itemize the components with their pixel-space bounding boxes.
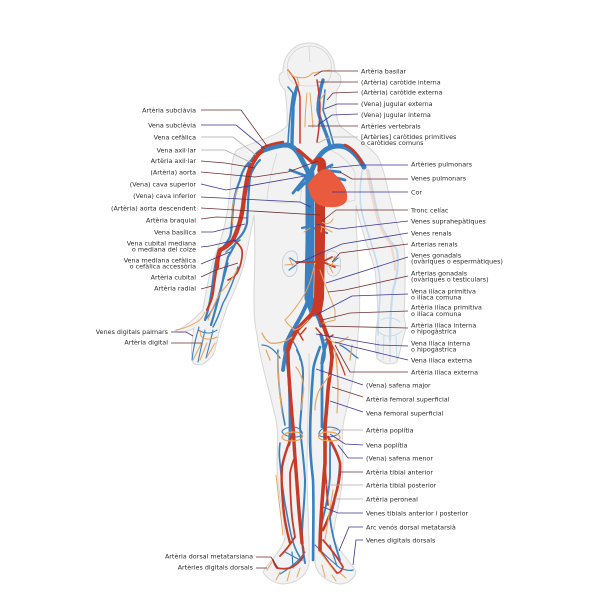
labels: right column lower: Artèria femoral superficial bbox=[366, 396, 450, 404]
labels: left column: Vena cefàlica bbox=[154, 134, 196, 142]
labels: right column middle: Venes renals bbox=[411, 230, 452, 238]
heart bbox=[308, 169, 347, 207]
labels: left column: Vena basílica bbox=[154, 228, 196, 236]
labels: right column upper bbox=[361, 68, 457, 147]
labels: right column lower: Venes tibials anterior i posterior bbox=[366, 510, 469, 518]
labels: left column: (Artèria) aorta descendent bbox=[111, 204, 196, 212]
labels: right column middle: (ovàriques o espermàtiques) bbox=[411, 258, 503, 266]
labels: right column lower: Vena poplítia bbox=[366, 442, 408, 450]
labels: right column middle: o ilíaca comuna bbox=[411, 310, 461, 318]
labels: right column middle: Venes suprahepàtiques bbox=[411, 218, 486, 226]
labels: left column: o mediana del colze bbox=[132, 246, 196, 254]
labels: left column: (Vena) cava inferior bbox=[133, 192, 196, 200]
faded right arm vessels bbox=[360, 167, 402, 362]
labels: right column middle: Artèria ilíaca primitiva bbox=[411, 304, 482, 312]
labels: right column upper: Artèria basilar bbox=[361, 68, 407, 76]
labels: right column middle: Artèria ilíaca interna bbox=[411, 322, 476, 330]
labels: right column upper: (Artèria) caròtide externa bbox=[361, 88, 443, 96]
labels: right column middle: o ilíaca comuna bbox=[411, 294, 461, 302]
labels: right column middle: Artèries pulmonars bbox=[411, 160, 473, 168]
labels: right column upper: [Artèries] caròtides primitives bbox=[361, 133, 457, 141]
labels: left column bbox=[96, 106, 254, 572]
labels: left column: Artèria digital bbox=[124, 338, 168, 346]
labels: left column: Artèria radial bbox=[154, 284, 196, 292]
labels: left column: Vena axil·lar bbox=[157, 146, 196, 154]
labels: right column middle: (ovàriques o testiculars) bbox=[411, 276, 489, 284]
labels: right column upper: Artèries vertebrals bbox=[361, 122, 421, 130]
labels: left column: Venes digitals palmars bbox=[96, 328, 169, 336]
labels: left column: Artèries digitals dorsals bbox=[178, 564, 254, 572]
labels: right column upper: (Vena) jugular interna bbox=[361, 111, 431, 119]
labels: right column middle: Tronc celíac bbox=[410, 206, 449, 214]
labels: right column middle: o hipogàstrica bbox=[411, 346, 456, 354]
labels: right column lower: Artèria peroneal bbox=[366, 496, 418, 504]
labels: right column lower: (Vena) safena major bbox=[366, 382, 431, 390]
labels: left column: o cefàlica accessòria bbox=[130, 262, 196, 270]
labels: right column middle: Venes pulmonars bbox=[411, 174, 467, 182]
labels: right column lower: Artèria tibial posterior bbox=[366, 482, 437, 490]
labels: left column: Artèria axil·lar bbox=[151, 157, 196, 165]
small orange arteries bbox=[176, 70, 352, 581]
labels: right column upper: (Vena) jugular externa bbox=[361, 100, 433, 108]
leader lines: left bbox=[171, 110, 320, 568]
labels: left column: Vena subclèvia bbox=[148, 122, 196, 130]
labels: left column: (Artèria) aorta bbox=[150, 168, 196, 176]
labels: left column: Artèria braquial bbox=[146, 216, 196, 224]
labels: left column: Artèria subclàvia bbox=[142, 106, 196, 114]
labels: right column upper: o caròtides comuns bbox=[361, 139, 424, 147]
labels: right column middle: o hipogàstrica bbox=[411, 328, 456, 336]
labels: right column middle: Vena ilíaca primitiva bbox=[411, 288, 476, 296]
labels: right column lower: Artèria poplítia bbox=[366, 426, 414, 434]
veins bbox=[192, 80, 364, 574]
labels: right column lower bbox=[366, 382, 469, 544]
labels: right column middle: Venes gonadals bbox=[411, 252, 462, 260]
labels: left column: Vena cubital mediana bbox=[127, 240, 196, 248]
labels: right column middle: Vena ilíaca interna bbox=[411, 340, 470, 348]
labels: right column middle: Cor bbox=[411, 188, 422, 196]
labels: right column middle: Artèria ilíaca externa bbox=[411, 368, 478, 376]
labels: right column lower: (Vena) safena menor bbox=[366, 454, 433, 462]
arteries bbox=[207, 70, 362, 573]
labels: left column: Vena mediana cefàlica bbox=[124, 256, 196, 264]
labels: right column middle: Arterias gonadals bbox=[411, 270, 468, 278]
labels: left column: Artèria dorsal metatarsiana bbox=[165, 552, 253, 560]
leader lines: right bbox=[296, 71, 408, 565]
labels: right column lower: Vena femoral superficial bbox=[366, 410, 444, 418]
labels: right column lower: Artèria tibial anterior bbox=[366, 468, 433, 476]
labels: left column: Artèria cubital bbox=[151, 274, 196, 282]
brain, face and lung outlines bbox=[267, 46, 355, 203]
labels: left column: (Vena) cava superior bbox=[130, 180, 196, 188]
labels: right column middle: Vena ilíaca externa bbox=[411, 356, 472, 364]
labels: right column upper: (Artèria) caròtide interna bbox=[361, 78, 441, 86]
kidneys bbox=[282, 251, 341, 276]
labels: right column lower: Arc venós dorsal metatarsià bbox=[366, 524, 456, 532]
body silhouette bbox=[175, 43, 406, 584]
labels: right column lower: Venes digitals dorsals bbox=[366, 536, 436, 544]
labels: right column middle: Arterias renals bbox=[411, 240, 458, 248]
labels: right column middle bbox=[410, 160, 503, 376]
